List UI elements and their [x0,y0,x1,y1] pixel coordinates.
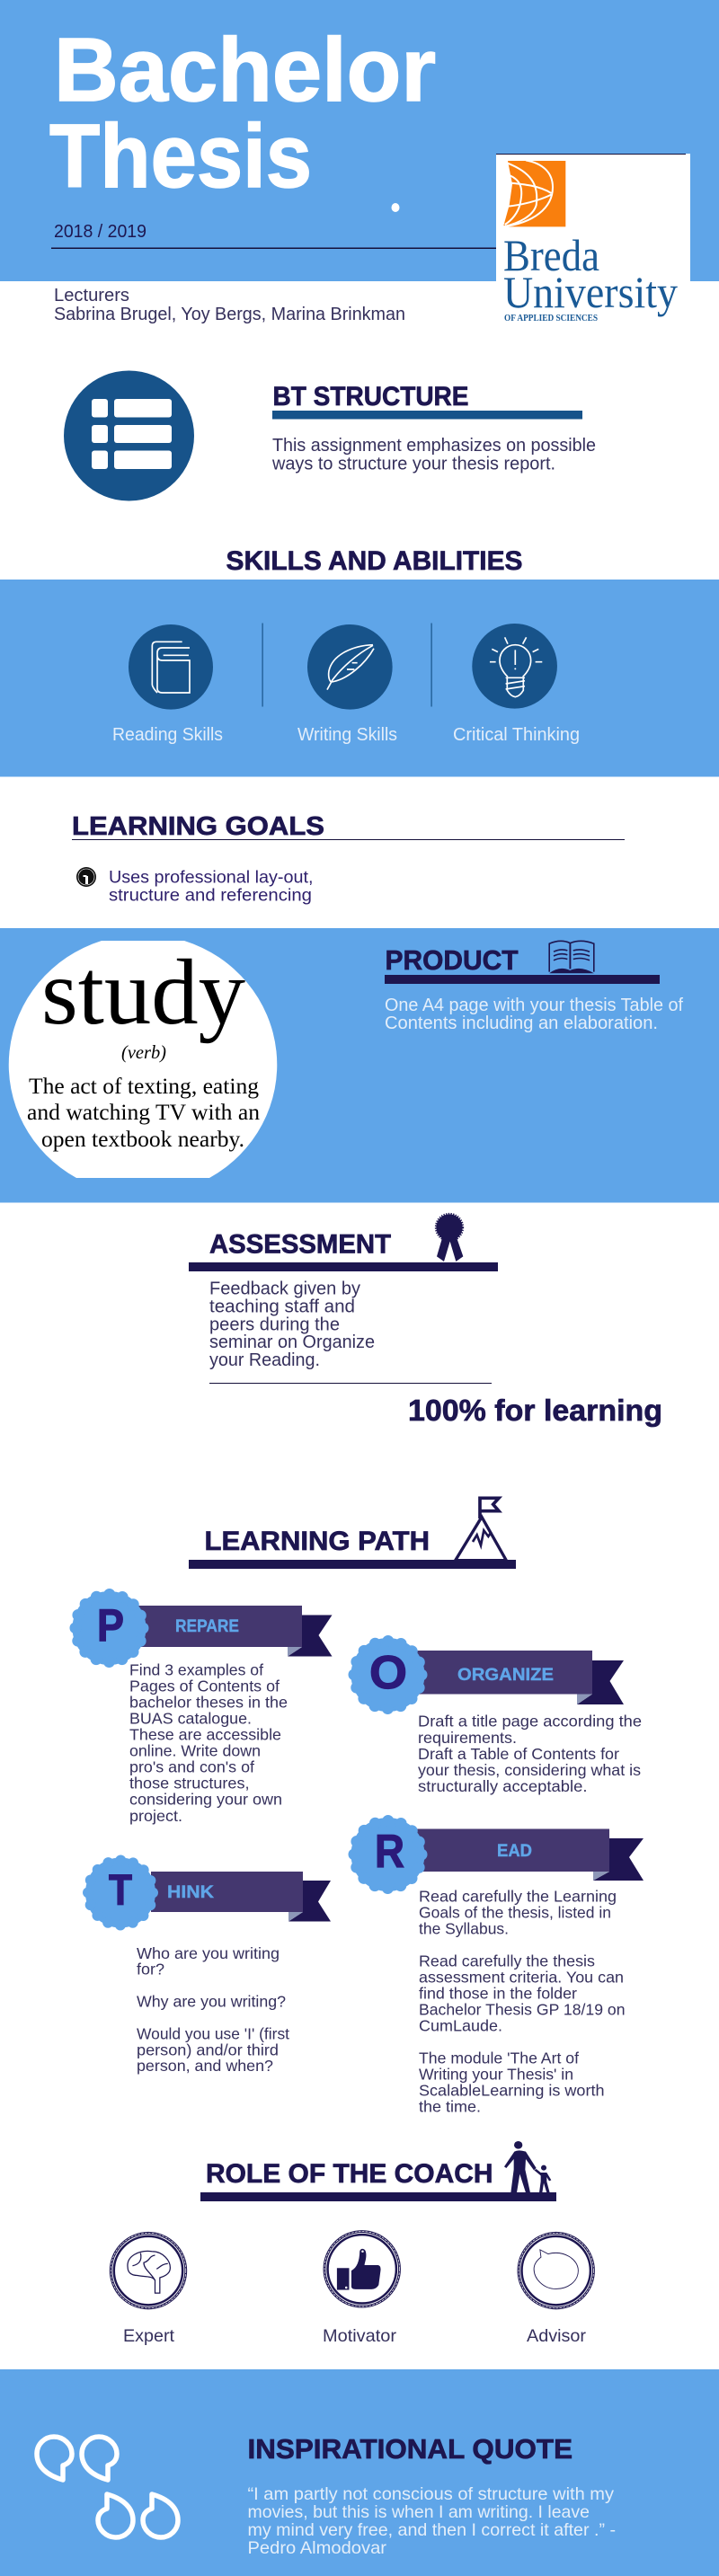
description: ways to structure your thesis report. [271,455,555,474]
label: advisor: Advisor [527,2326,587,2346]
panel: BT structure [271,382,596,474]
title [49,20,436,207]
think text: Would you use 'I' (first [137,2024,289,2042]
icon: orange globe [502,160,565,226]
icon: ribbon [436,1214,463,1261]
panel: assessment: ASSESSMENT [209,1229,391,1260]
read text: Bachelor Thesis GP 18/19 on [419,2000,626,2018]
read text: assessment criteria. You can [419,1969,624,1987]
icon: motivator thumbs up [324,2232,400,2306]
organize text: structurally acceptable. [418,1777,588,1795]
step: read [351,1818,644,2116]
prepare text: BUAS catalogue. [129,1710,252,1728]
panel: assessment [189,1214,662,1427]
quote text: my mind very free, and then I correct it after .” - [248,2520,616,2540]
read text: The module 'The Art of [419,2049,579,2067]
study definition: study [41,941,245,1044]
product description: One A4 page with your thesis Table of [385,996,683,1015]
icon: bullet [76,867,96,887]
goal text: Uses professional lay-out, [109,868,313,888]
assessment text: seminar on Organize [209,1332,375,1352]
think text [137,1944,289,2075]
assessment text: peers during the [209,1315,340,1335]
icon: adult and child [504,2141,551,2192]
label: writing skills: Writing Skills [297,725,397,745]
read text: ScalableLearning is worth [419,2082,604,2100]
assessment text: your Reading. [209,1350,320,1370]
prepare text: considering your own [129,1791,282,1809]
icon: books [129,624,213,710]
organize text: requirements. [418,1729,517,1747]
heading: inspirational quote: INSPIRATIONAL QUOTE [248,2433,573,2465]
assessment text: teaching staff and [209,1297,355,1317]
icon: quotation marks [37,2437,178,2537]
read text: Read carefully the thesis [419,1952,595,1970]
step: prepare: P [97,1599,124,1651]
prepare text: those structures, [129,1775,250,1793]
panel: inspirational quote [0,2369,719,2576]
think text: for? [137,1961,164,1978]
label: expert: Expert [123,2326,175,2346]
icon: expert brain [111,2233,186,2308]
panel: learning goals [72,812,625,906]
prepare text: These are accessible [129,1726,281,1744]
think text: person, and when? [137,2057,273,2075]
logo: Breda University [496,154,690,329]
quote text: movies, but this is when I am writing. I leave [248,2502,590,2522]
quote text: “I am partly not conscious of structure with my [248,2484,614,2504]
assessment text: Feedback given by [209,1279,360,1299]
logo text: University [503,267,678,317]
read text: Read carefully the Learning [419,1887,617,1905]
callout: 100% for learning: 100% for learning [408,1394,662,1427]
study definition: open textbook nearby. [41,1128,244,1152]
panel: study and product [0,928,719,1202]
label: motivator: Motivator [323,2326,397,2346]
quote text [248,2484,616,2558]
prepare text [129,1660,288,1825]
icon: advisor speech bubble [519,2233,593,2308]
study definition: (verb) [121,1041,166,1063]
step: read: R [375,1826,404,1878]
icon: open book [549,941,594,973]
title: Bachelor [54,20,436,120]
lecturers: Sabrina Brugel, Yoy Bergs, Marina Brinkman [54,305,405,324]
icon: feather [307,624,393,710]
lecturers: Lecturers [54,286,129,305]
label: reading skills: Reading Skills [112,725,223,745]
goal text: structure and referencing [109,886,312,906]
organize text: Draft a Table of Contents for [418,1745,619,1763]
think text: Why are you writing? [137,1993,286,2011]
read text: the Syllabus. [419,1919,509,1937]
step: think: T [109,1867,132,1915]
step: think [85,1858,331,2075]
prepare text: bachelor theses in the [129,1693,288,1711]
organize text: your thesis, considering what is [418,1761,641,1779]
step: prepare [72,1591,333,1825]
step: read: EAD [497,1841,532,1861]
read text: find those in the folder [419,1985,577,2003]
step: organize [351,1638,642,1795]
prepare text: online. Write down [129,1742,261,1760]
panel: learning path [72,1498,644,2116]
step: prepare: REPARE [175,1616,239,1636]
description [271,436,596,474]
panel: header [0,0,719,281]
think text: Who are you writing [137,1944,280,1962]
read text [419,1887,626,2116]
white dot [392,203,399,212]
panel: learning goals: LEARNING GOALS [72,812,324,841]
panel: learning path: LEARNING PATH [205,1527,430,1556]
panel: role of the coach [111,2141,593,2346]
product description: Contents including an elaboration. [385,1014,658,1033]
product description [385,996,683,1033]
logo text: Breda [503,230,599,280]
assessment text [209,1279,375,1370]
title: Thesis [49,106,312,207]
study definition: and watching TV with an [27,1101,261,1125]
think text: person) and/or third [137,2040,279,2058]
study definition [9,941,277,1178]
prepare text: project. [129,1807,182,1825]
prepare text: Pages of Contents of [129,1677,280,1695]
icon: structure list [64,370,194,501]
read text: the time. [419,2098,481,2116]
logo text: OF APPLIED SCIENCES [504,314,598,323]
panel: BT structure: BT STRUCTURE [273,382,469,412]
icon: mountain flag [456,1498,506,1561]
description: This assignment emphasizes on possible [272,436,596,456]
organize text: Draft a title page according the [418,1713,642,1731]
read text: Writing your Thesis' in [419,2065,573,2083]
lecturers [54,286,405,324]
read text: Goals of the thesis, listed in [419,1903,611,1921]
panel: role of the coach: ROLE OF THE COACH [206,2159,493,2189]
prepare text: pro's and con's of [129,1758,254,1776]
heading: product: PRODUCT [385,944,519,976]
step: organize: ORGANIZE [457,1665,554,1685]
step: organize: O [369,1647,407,1699]
organize text [418,1713,642,1795]
study definition: The act of texting, eating [29,1075,259,1099]
read text: CumLaude. [419,2016,502,2034]
panel: skills [0,580,719,776]
step: think: HINK [167,1882,214,1902]
quote text: Pedro Almodovar [248,2538,387,2558]
logo text [503,230,678,323]
label: critical thinking: Critical Thinking [453,725,580,745]
heading: skills and abilities: SKILLS AND ABILITIES [226,546,523,576]
icon: light bulb [472,624,557,709]
academic year: 2018 / 2019 [54,222,146,242]
goal text [109,868,313,906]
prepare text: Find 3 examples of [129,1660,263,1678]
